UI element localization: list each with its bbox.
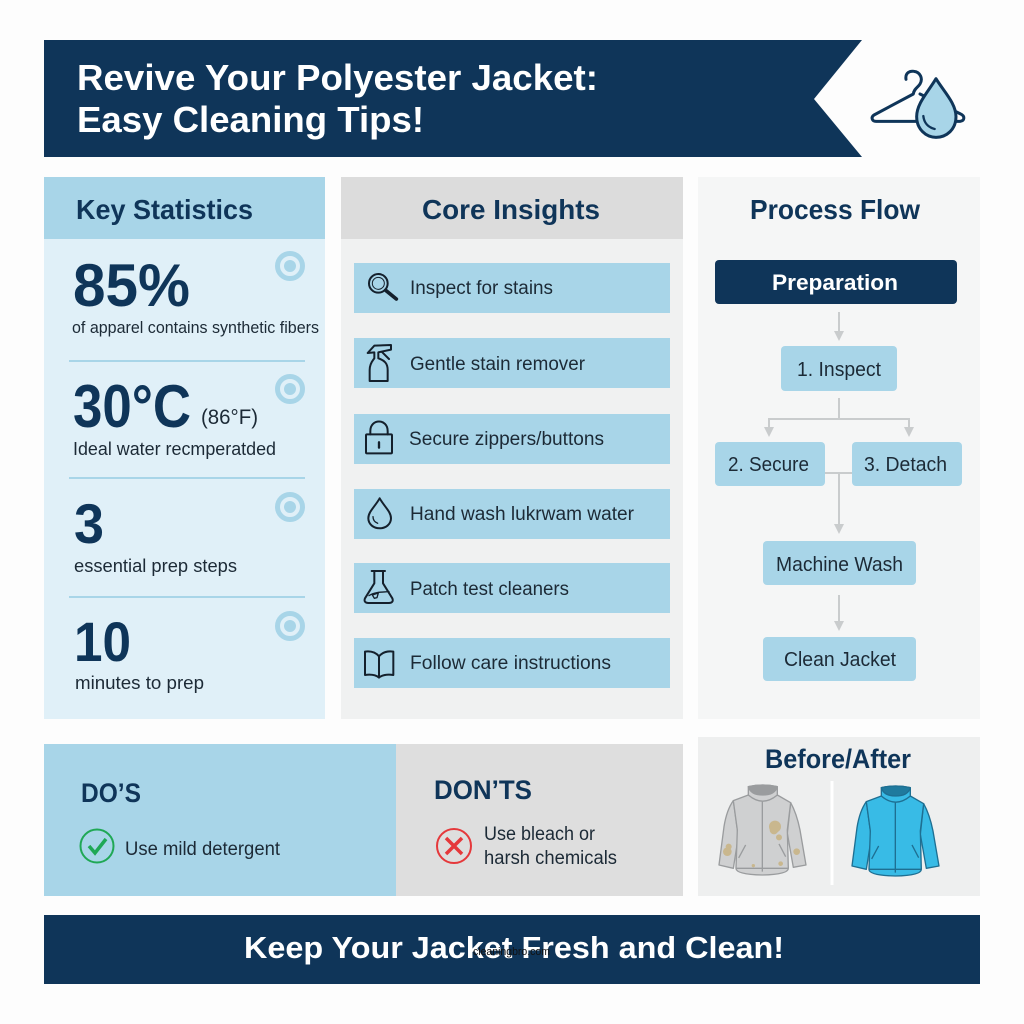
stat: 30°C [73,373,302,459]
heading: key statistics: Key Statistics [76,194,253,225]
watermark: cleaningbro.com [473,946,550,958]
row: patch test [354,563,670,613]
stat: 3 prep steps [74,492,302,576]
row: follow care [354,638,670,688]
row: secure zippers/buttons [354,414,670,464]
step: secure [715,442,825,486]
heading: before/after: Before/After [765,744,911,774]
stat: 3 prep steps: essential prep steps [74,556,237,576]
stat: 10 minutes [74,610,302,693]
stat: 85%: of apparel contains synthetic fibers [72,319,319,337]
step: machine wash [763,541,916,585]
step: machine wash: Machine Wash [776,554,903,576]
do item: Use mild detergent [125,839,281,860]
panel: core insights [341,177,683,719]
row: follow care: Follow care instructions [410,653,611,674]
icon: red cross [437,829,471,863]
don't item [484,824,617,869]
stat: 30°C: Ideal water recmperatded [73,439,276,459]
panel: key statistics [44,177,325,719]
stat: 10 minutes: minutes to prep [75,673,204,693]
don't item: Use bleach or [484,824,596,845]
row: gentle stain remover: Gentle stain remover [410,354,586,375]
heading: don'ts: DON’TS [434,775,532,805]
icon: green check [80,830,114,862]
row: secure zippers/buttons: Secure zippers/buttons [409,429,604,450]
row: hand wash [354,489,670,539]
row: patch test: Patch test cleaners [410,579,569,600]
step: preparation: Preparation [772,270,898,295]
arrow: join to machine wash [825,473,852,534]
title banner: Easy Cleaning Tips! [77,99,424,140]
title banner: Revive Your Polyester Jacket: [77,57,598,98]
footer banner: Keep Your Jacket Fresh and Clean! [244,930,784,965]
stat: 30°C: (86°F) [201,406,258,429]
step: detach [852,442,962,486]
stat: 10 minutes: 10 [74,610,131,673]
step: inspect [781,346,897,391]
jacket: before [719,785,806,875]
row: inspect for stains: Inspect for stains [410,278,553,299]
stat: 85%: 85% [73,252,190,319]
step: preparation [715,260,957,304]
row: gentle stain remover [354,338,670,388]
arrow: inspect branching [764,398,914,437]
step: secure: 2. Secure [728,454,809,476]
don't item: harsh chemicals [484,848,617,869]
stat: 30°C: 30°C [73,373,191,440]
step: clean jacket [763,637,916,681]
arrow: preparation to inspect [834,312,844,341]
panel: do's [44,744,396,896]
arrow: machine wash to clean jacket [834,595,844,631]
panel: process flow [698,177,980,719]
title banner [44,40,862,157]
heading: process flow: Process Flow [750,194,920,225]
step: detach: 3. Detach [864,454,947,476]
row: hand wash: Hand wash lukrwam water [410,504,635,525]
icon: hanger with water drop [872,71,964,137]
panel: don'ts [396,744,683,896]
stat: 3 prep steps: 3 [74,492,104,555]
jacket: after [852,786,939,876]
step: clean jacket: Clean Jacket [784,649,896,671]
heading: core insights: Core Insights [422,194,600,225]
stat: 85% [72,252,319,337]
step: inspect: 1. Inspect [797,359,881,381]
panel: before/after [698,737,980,896]
heading: do's: DO’S [81,778,141,808]
footer banner [44,915,980,984]
row: inspect for stains [354,263,670,313]
